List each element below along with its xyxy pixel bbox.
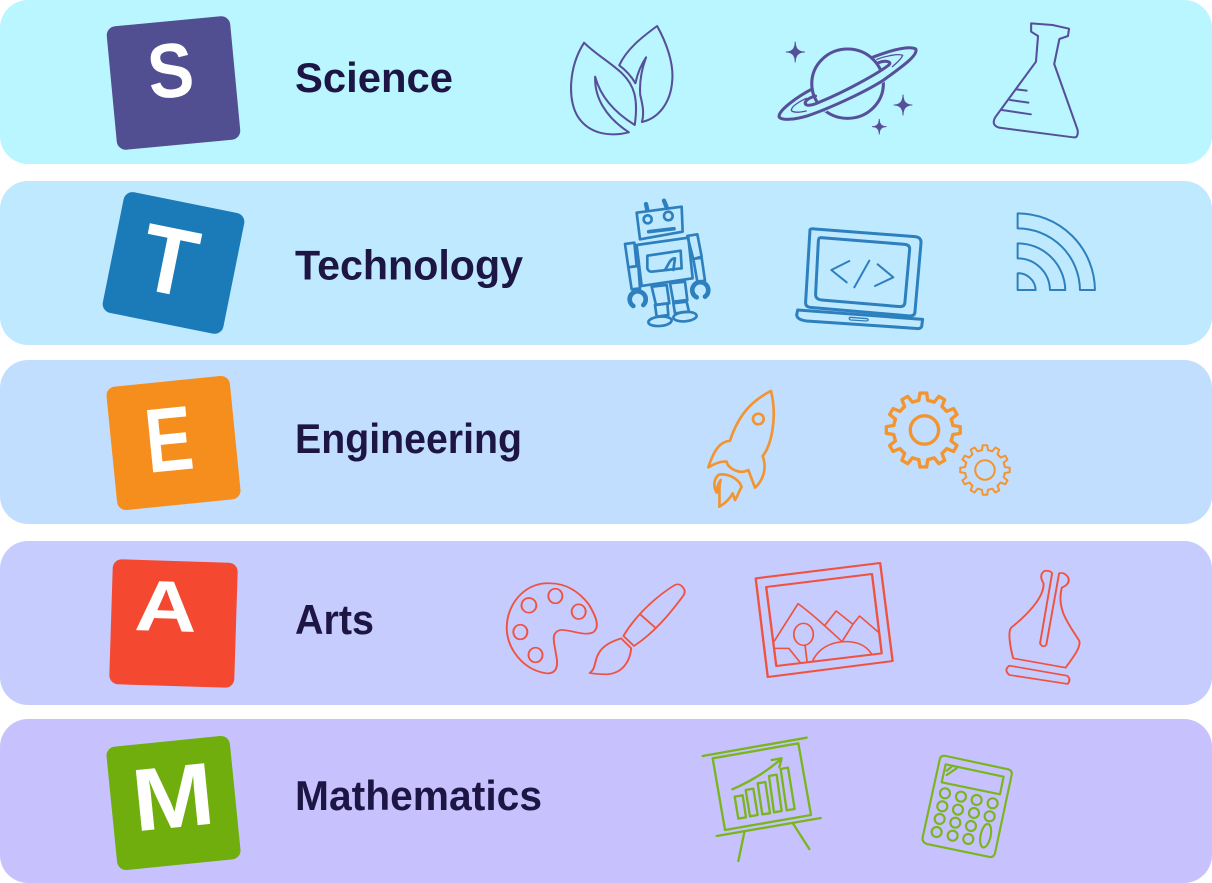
heading: Engineering: Engineering <box>295 415 522 462</box>
letter tile E: E <box>140 387 198 493</box>
large gear <box>886 393 960 467</box>
letter tile M: M <box>127 743 219 850</box>
panel: arts <box>0 541 1212 705</box>
mathematics band <box>0 719 1212 883</box>
letter tile S <box>106 15 241 151</box>
icon: paintbrush <box>590 584 685 674</box>
panel: mathematics <box>0 719 1212 883</box>
panel: engineering <box>0 360 1212 524</box>
icon: signal waves <box>1018 213 1095 290</box>
icon: leaves <box>571 26 672 134</box>
letter tile E <box>106 375 241 511</box>
letter tile T: T <box>132 203 207 319</box>
heading: Technology: Technology <box>295 242 524 288</box>
letter tile S: S <box>144 26 197 116</box>
arts band <box>0 541 1212 705</box>
letter tile M <box>106 735 241 871</box>
technology band <box>0 181 1212 345</box>
heading: Mathematics: Mathematics <box>295 772 542 819</box>
icon: laptop with code <box>797 229 923 329</box>
icon: rocket <box>708 391 774 507</box>
letter tile A: A <box>133 565 198 647</box>
icon: palette <box>507 583 597 673</box>
letter tile A <box>109 559 238 688</box>
icon: ringed planet <box>779 42 916 134</box>
icon: calculator <box>922 756 1012 857</box>
heading: Science: Science <box>295 54 453 101</box>
science band <box>0 0 1212 164</box>
engineering band <box>0 360 1212 524</box>
heading: Arts: Arts <box>295 596 374 643</box>
icon: gears <box>886 393 1010 495</box>
small gear <box>960 445 1010 495</box>
icon: robot <box>625 201 708 327</box>
icon: presentation chart <box>703 738 821 861</box>
icon: framed picture <box>756 563 893 677</box>
panel: technology <box>0 181 1212 345</box>
panel: science <box>0 0 1212 164</box>
icon: flask <box>994 23 1078 137</box>
icon: pen nib <box>1006 571 1080 684</box>
letter tile T <box>101 191 246 335</box>
